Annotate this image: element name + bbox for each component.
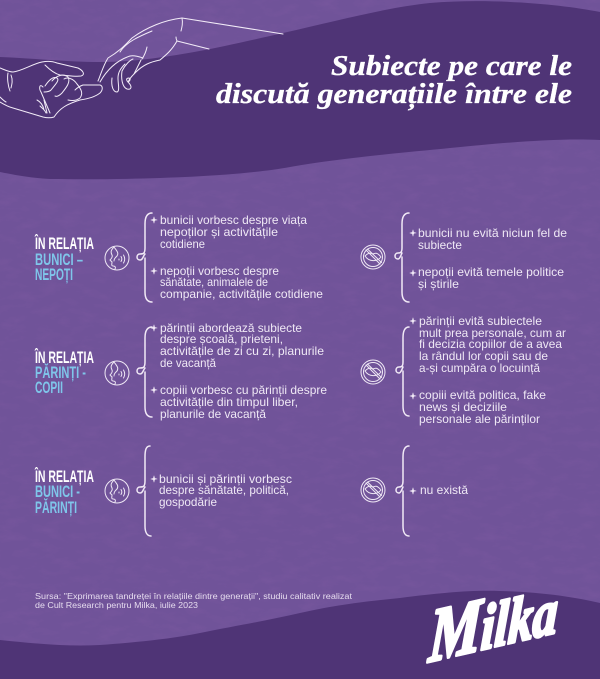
text: discussed topics: sănătate, animalele de — [160, 276, 268, 289]
row label: BUNICI – — [35, 251, 83, 269]
text: avoided topics: la rândul lor copii sau de — [419, 350, 548, 363]
row label — [34, 348, 94, 397]
title: Subiecte pe care le — [331, 51, 572, 82]
upper hand — [98, 18, 283, 92]
text: discussed topics: părinții abordează subiecte — [160, 322, 302, 335]
text: avoided topics: personale ale părinților — [419, 413, 540, 426]
text: discussed topics: activitățile din timpul liber, — [160, 396, 298, 409]
row 2: părinți - copii — [34, 315, 566, 426]
row label — [34, 234, 94, 284]
logo: Milka: Milka — [426, 565, 560, 679]
text: discussed topics — [151, 322, 327, 421]
brace: avoided topics — [395, 213, 409, 302]
text: avoided topics: și știrile — [418, 278, 459, 291]
text: avoided topics: subiecte — [418, 239, 462, 252]
row label — [34, 467, 94, 517]
icon: avoided talk — [361, 478, 385, 502]
source note: Sursa: "Exprimarea tandreței în relațiile dintre generații", studiu calitativ realizat — [35, 591, 353, 601]
icon: avoided talk — [361, 360, 385, 384]
brace: discussed topics — [137, 327, 152, 417]
icon: speaking face — [105, 361, 129, 385]
text: discussed topics: nepoții vorbesc despre — [160, 265, 279, 278]
text: discussed topics: despre școală, prieteni, — [160, 333, 283, 346]
text: discussed topics: cotidiene — [160, 238, 205, 251]
text: avoided topics: news și deciziile — [419, 401, 507, 414]
text: discussed topics: activitățile de zi cu zi, planurile — [160, 345, 324, 358]
text: discussed topics: nepoților și activitățile — [160, 226, 278, 239]
row label: ÎN RELAȚIA — [34, 234, 94, 253]
text: discussed topics: companie, activitățile cotidiene — [160, 288, 323, 301]
title — [216, 51, 572, 110]
row label: BUNICI - — [35, 483, 80, 501]
text: avoided topics: fi decizia copiilor de a avea — [419, 338, 563, 351]
row 1: bunici - nepoți — [34, 213, 567, 302]
brace: discussed topics — [137, 213, 152, 302]
text: discussed topics: gospodărie — [159, 496, 217, 509]
text: avoided topics: mult prea personale, cum ar — [419, 327, 566, 340]
icon: speaking face — [105, 246, 129, 270]
row label: NEPOȚI — [35, 266, 73, 284]
row 3: bunici - părinți — [34, 446, 469, 536]
icon: speaking face — [105, 479, 129, 503]
text: discussed topics: de vacanță — [160, 357, 217, 370]
row label: PĂRINȚI - — [35, 363, 86, 382]
text: discussed topics: planurile de vacanță — [160, 408, 267, 421]
text: avoided topics: bunicii nu evită niciun fel de — [418, 227, 567, 240]
row label: ÎN RELAȚIA — [34, 348, 94, 367]
header band — [0, 1, 600, 179]
brace: avoided topics — [396, 446, 409, 536]
footer band — [0, 591, 600, 679]
text: avoided topics: a-și cumpăra o locuință — [419, 362, 541, 375]
row label: COPII — [35, 379, 63, 397]
title: discută generațiile între ele — [216, 79, 572, 110]
text: avoided topics — [410, 315, 566, 426]
text: avoided topics — [410, 227, 567, 291]
text: discussed topics — [151, 214, 323, 301]
source note: de Cult Research pentru Milka, iulie 2023 — [35, 600, 198, 610]
text: discussed topics: despre sănătate, politică, — [159, 484, 289, 497]
icon: avoided talk — [361, 245, 385, 269]
brace: avoided topics — [396, 327, 409, 416]
row label: ÎN RELAȚIA — [34, 467, 94, 486]
row label: PĂRINȚI — [35, 498, 77, 517]
text: avoided topics: nepoții evită temele politice — [418, 266, 564, 279]
text: avoided topics: nu există — [420, 484, 469, 497]
source note — [35, 591, 353, 610]
text: discussed topics: bunicii și părinții vorbesc — [159, 473, 292, 486]
brace: discussed topics — [137, 446, 151, 536]
lower hand — [0, 61, 102, 118]
text: discussed topics: copiii vorbesc cu părinții despre — [160, 384, 327, 397]
text: avoided topics: părinții evită subiectele — [419, 315, 542, 328]
text: discussed topics: bunicii vorbesc despre viața — [160, 214, 308, 227]
illustration: two hands reaching — [0, 18, 283, 118]
text: avoided topics: copiii evită politica, fake — [419, 389, 546, 402]
text: discussed topics — [151, 473, 292, 509]
